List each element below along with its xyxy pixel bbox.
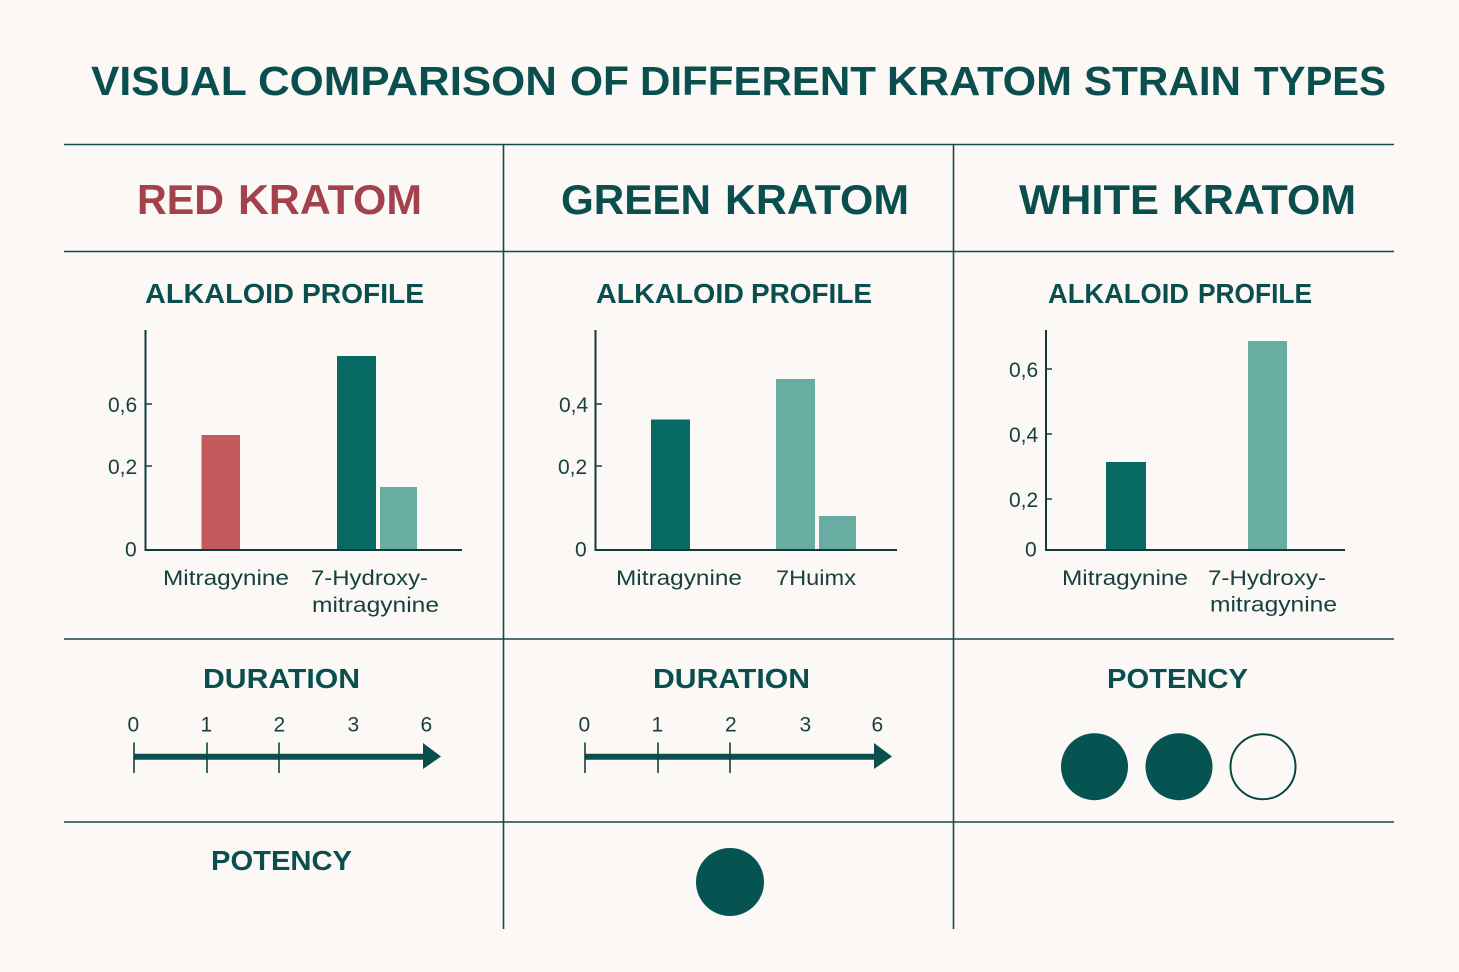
bar chart: white: 0,4 <box>1009 424 1039 447</box>
potency dot: green <box>696 848 764 916</box>
title: OF <box>570 58 629 104</box>
heading: green duration: DURATION <box>653 663 810 694</box>
panel: green duration <box>578 663 892 773</box>
timeline arrow: red: 1 <box>200 714 212 736</box>
bar chart: red: 0 <box>125 538 137 562</box>
bar chart: red: 0,6 <box>108 394 137 417</box>
bar chart: green: 0,4 <box>559 394 589 417</box>
heading: green kratom: GREEN <box>561 176 711 223</box>
timeline arrow: green <box>578 714 892 773</box>
bar chart: green: 7Huimx <box>776 567 857 590</box>
bar chart: white: Mitragynine <box>1062 567 1188 590</box>
timeline arrow: green: 3 <box>800 714 811 736</box>
timeline arrow: green: 0 <box>578 714 590 736</box>
heading: white kratom: WHITE <box>1019 176 1159 223</box>
bar chart: red: Mitragynine <box>163 567 289 590</box>
heading: red alkaloid profile: PROFILE <box>302 278 424 309</box>
heading: red alkaloid profile: ALKALOID <box>145 278 294 309</box>
bar chart: red: 0,2 <box>108 456 137 479</box>
heading: green kratom: KRATOM <box>725 176 909 223</box>
title: DIFFERENT <box>640 58 876 104</box>
panel: white potency <box>1061 663 1296 800</box>
heading: white alkaloid profile: PROFILE <box>1198 278 1312 309</box>
timeline arrow: red <box>128 714 441 773</box>
title: VISUAL <box>91 58 246 104</box>
bar chart: white <box>1009 330 1345 616</box>
bar chart: red: 7-Hydroxy- <box>311 567 428 590</box>
potency dots: white <box>1061 733 1296 800</box>
panel: red alkaloid profile <box>108 278 462 617</box>
timeline arrow: red: 3 <box>348 714 359 736</box>
bar chart: white: 0 <box>1025 538 1037 562</box>
heading: red kratom: KRATOM <box>238 176 422 223</box>
heading: red kratom: RED <box>137 176 224 223</box>
heading: red potency: POTENCY <box>211 845 352 876</box>
bar chart: green: 0 <box>575 538 587 562</box>
bar chart: white: 0,6 <box>1009 359 1038 382</box>
timeline arrow: red: 6 <box>420 714 432 736</box>
heading: green alkaloid profile: PROFILE <box>751 278 872 309</box>
timeline arrow: red: 2 <box>274 714 285 736</box>
title: STRAIN <box>1084 58 1241 104</box>
timeline arrow: green: 2 <box>725 714 737 736</box>
title: KRATOM <box>887 58 1072 104</box>
panel: red duration <box>128 663 441 773</box>
bar chart: white: mitragynine <box>1210 594 1337 616</box>
timeline arrow: green: 6 <box>872 714 883 736</box>
panel: white alkaloid profile <box>1009 278 1345 616</box>
bar chart: green: Mitragynine <box>616 567 742 590</box>
timeline arrow: red: 0 <box>128 714 139 736</box>
title: COMPARISON <box>258 58 557 104</box>
heading: green alkaloid profile: ALKALOID <box>596 278 744 309</box>
bar chart: red: mitragynine <box>312 594 439 617</box>
title: TYPES <box>1254 58 1386 104</box>
heading: white kratom: KRATOM <box>1172 176 1356 223</box>
heading: white potency: POTENCY <box>1107 663 1248 694</box>
bar chart: white: 0,2 <box>1009 489 1038 512</box>
heading: red duration: DURATION <box>203 663 360 694</box>
bar chart: green: 0,2 <box>558 456 587 479</box>
panel: green alkaloid profile <box>558 278 897 590</box>
bar chart: red <box>108 330 462 617</box>
bar chart: white: 7-Hydroxy- <box>1208 567 1326 590</box>
comparison table grid <box>64 144 1394 929</box>
bar chart: green <box>558 330 897 590</box>
timeline arrow: green: 1 <box>652 714 663 736</box>
heading: white alkaloid profile: ALKALOID <box>1048 278 1189 309</box>
